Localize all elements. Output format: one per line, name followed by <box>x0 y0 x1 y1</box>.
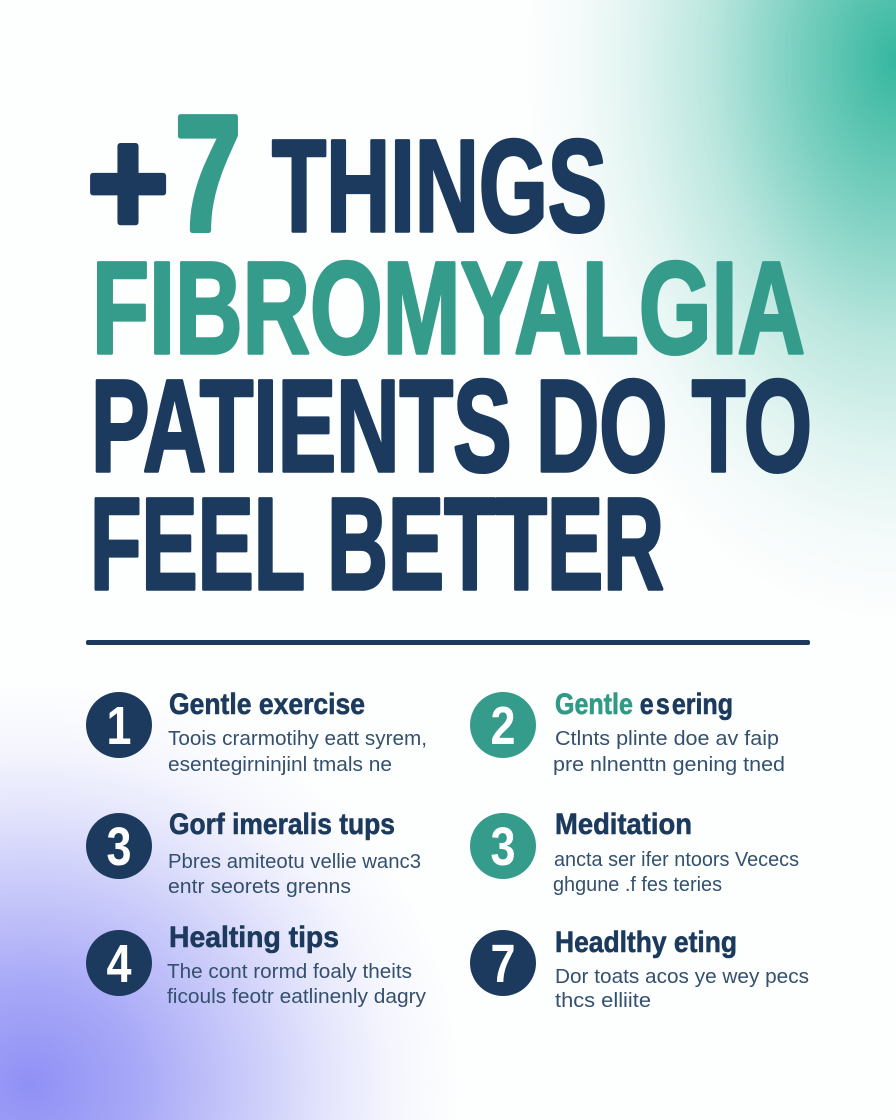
badge 4 <box>86 930 152 996</box>
body meditation: ancta ser ifer ntoors Vececs <box>554 849 799 871</box>
heading 2: Gentle e s ering <box>555 688 733 721</box>
badge 2: 2 <box>490 696 516 756</box>
badge 3 teal <box>470 813 536 879</box>
heading 1: Gentle exercise <box>169 688 365 721</box>
body meditation: ghgune .f fes teries <box>553 874 722 896</box>
badge 3 <box>86 813 152 879</box>
body 1: esentegirninjinl tmals ne <box>168 754 392 776</box>
heading healting tips: Healting tips <box>169 921 339 954</box>
badge 3 teal: 3 <box>490 817 516 877</box>
body 3: Pbres amiteotu vellie wanc3 <box>168 851 421 873</box>
body headlthy eting: Dor toats acos ye wey pecs <box>555 966 809 988</box>
body 1: Toois crarmotihy eatt syrem, <box>168 728 427 750</box>
item 2: gentle ering <box>470 688 785 776</box>
badge 7: 7 <box>490 934 516 994</box>
body healting tips: ficouls feotr eatlinenly dagry <box>167 986 426 1008</box>
title <box>87 82 812 617</box>
body 3: entr seorets grenns <box>168 876 351 898</box>
badge 3: 3 <box>106 817 132 877</box>
body 2: pre nlnenttn gening tned <box>553 754 785 776</box>
body healting tips <box>167 961 426 1008</box>
body healting tips: The cont rormd foaly theits <box>167 961 412 983</box>
body headlthy eting: thcs elliite <box>555 990 651 1012</box>
item 3: gorf imeralis tips <box>86 808 421 898</box>
item 5: healting tips <box>86 921 426 1008</box>
body 2 <box>553 728 785 776</box>
badge 1: 1 <box>106 696 132 756</box>
title line 1: +7 things: 7 <box>175 82 241 265</box>
body headlthy eting <box>555 966 809 1012</box>
badge 4: 4 <box>106 934 132 994</box>
badge 7 <box>470 930 536 996</box>
title line 1: +7 things: + <box>87 98 169 266</box>
badge 2 <box>470 692 536 758</box>
title line 1: +7 things <box>87 82 607 266</box>
item 4: meditation <box>470 808 799 896</box>
item 1: gentle exercise <box>86 688 427 776</box>
body 3 <box>168 851 421 898</box>
body meditation <box>553 849 799 896</box>
heading 3: Gorf imeralis tups <box>169 808 395 841</box>
body 2: Ctlnts plinte doe av faip <box>555 728 779 750</box>
heading meditation: Meditation <box>555 808 692 841</box>
body 1 <box>168 728 427 776</box>
heading headlthy eting: Headlthy eting <box>555 926 737 959</box>
badge 1 <box>86 692 152 758</box>
item 6: headlthy eting <box>470 926 809 1012</box>
